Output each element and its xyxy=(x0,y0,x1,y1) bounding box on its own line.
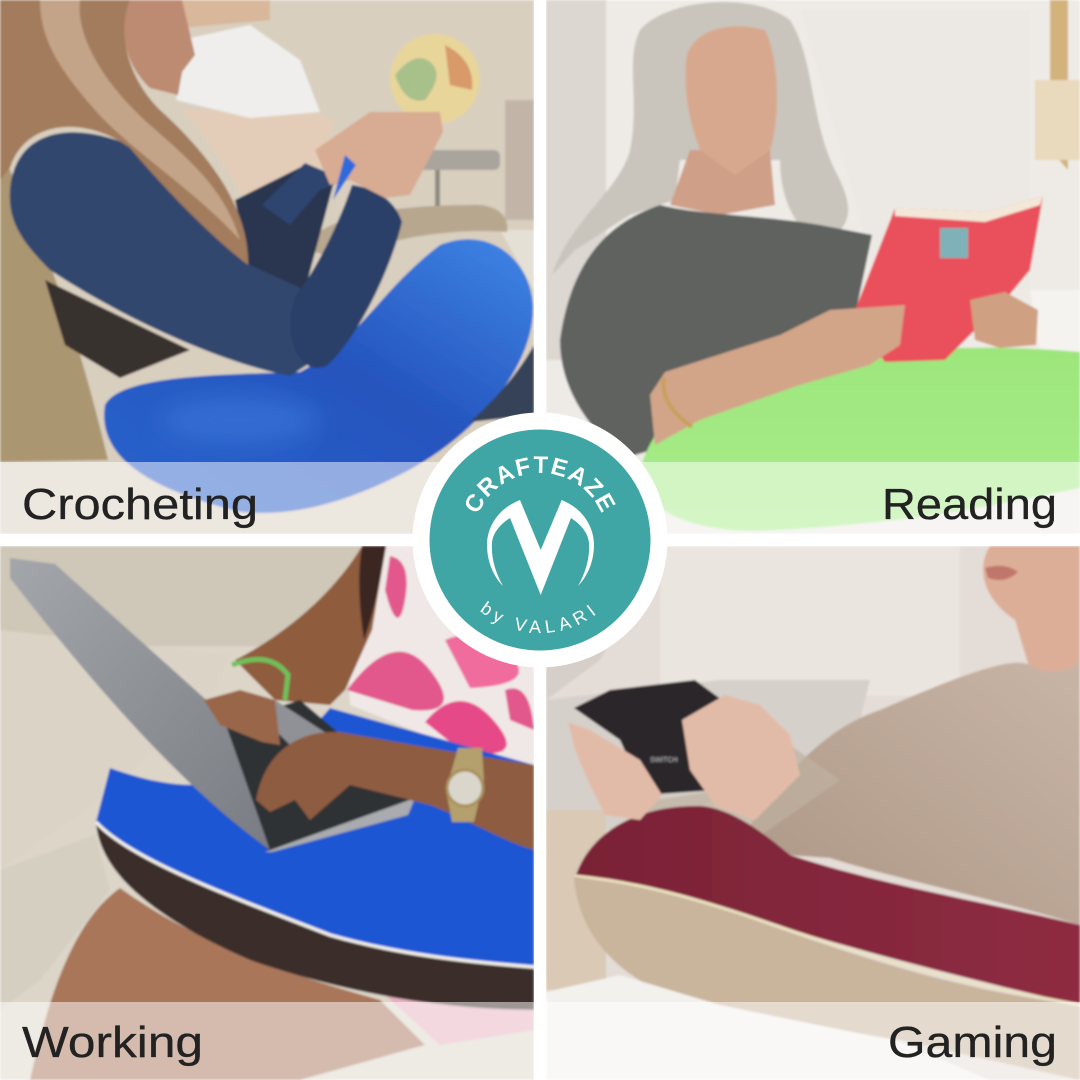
neck xyxy=(670,150,775,215)
headboard background xyxy=(546,0,1080,534)
sweater body and arm xyxy=(10,132,330,376)
label strip: gaming xyxy=(546,1002,1080,1080)
face xyxy=(124,0,195,95)
game console: SWITCH xyxy=(650,757,678,764)
panel: crocheting photo xyxy=(0,0,534,534)
room background xyxy=(546,546,1080,1080)
laptop xyxy=(10,558,415,852)
floral dress xyxy=(347,546,534,1045)
book hand xyxy=(970,292,1038,348)
far sleeve xyxy=(262,163,345,225)
pillow highlight xyxy=(160,395,320,445)
label text: crocheting: Crocheting xyxy=(22,480,258,529)
tan pillow base xyxy=(574,878,1080,1080)
cream piping xyxy=(575,876,1080,1005)
book cover picture xyxy=(940,228,968,258)
wine pillow top xyxy=(575,806,1080,1005)
sweater sleeve xyxy=(290,185,402,368)
dark jeans xyxy=(470,345,534,422)
hands xyxy=(315,112,443,198)
forearm and front hand xyxy=(650,305,905,445)
left hand xyxy=(204,690,280,745)
blue yarn xyxy=(333,155,356,200)
knit sweater xyxy=(740,655,1080,925)
logo mark: M xyxy=(487,500,594,595)
red book xyxy=(852,196,1043,362)
label strip: working xyxy=(0,1002,534,1080)
book page edge xyxy=(895,196,1043,222)
legs xyxy=(30,888,425,1080)
dark inner shirt xyxy=(235,165,335,290)
logo wordmark: CRAFTEAZE: CRAFTEAZE xyxy=(466,456,616,513)
hair xyxy=(0,0,248,265)
label text: reading: Reading xyxy=(882,480,1057,529)
white piping xyxy=(96,822,534,967)
panel: gaming photo xyxy=(546,546,1080,1080)
blue pillow xyxy=(104,239,533,513)
gamer left hand xyxy=(568,722,662,820)
globe xyxy=(390,34,480,124)
white blanket xyxy=(546,975,990,1080)
face xyxy=(686,26,777,175)
wristwatch xyxy=(446,748,484,822)
arm and hand on laptop xyxy=(256,732,534,850)
neck and face xyxy=(983,546,1080,680)
panel: reading photo xyxy=(546,0,1080,534)
grey sweater xyxy=(560,205,872,458)
silver hair xyxy=(552,2,848,275)
gamer right hand xyxy=(682,695,800,820)
logo tagline: by VALARI: by VALARI xyxy=(480,600,596,634)
label text: gaming: Gaming xyxy=(888,1018,1057,1067)
knit fabric xyxy=(305,205,507,258)
sofa background xyxy=(0,546,534,1080)
bracelet xyxy=(664,378,692,427)
panel: working photo xyxy=(0,546,534,1080)
label text: working: Working xyxy=(22,1018,203,1067)
sweater hem at pillow xyxy=(620,745,840,850)
room background xyxy=(0,0,534,534)
tan sofa cushion xyxy=(0,150,108,462)
blue pillow top xyxy=(96,708,534,967)
green pillow xyxy=(640,348,1080,531)
game console xyxy=(574,680,732,795)
logo badge xyxy=(412,412,668,668)
green wristband xyxy=(232,659,288,700)
patterned blouse xyxy=(45,280,190,378)
label strip: reading xyxy=(546,462,1080,534)
label strip: crocheting xyxy=(0,462,534,534)
lips xyxy=(985,566,1018,580)
brown pillow underside xyxy=(96,822,534,1010)
upper arm and hair xyxy=(235,546,386,705)
